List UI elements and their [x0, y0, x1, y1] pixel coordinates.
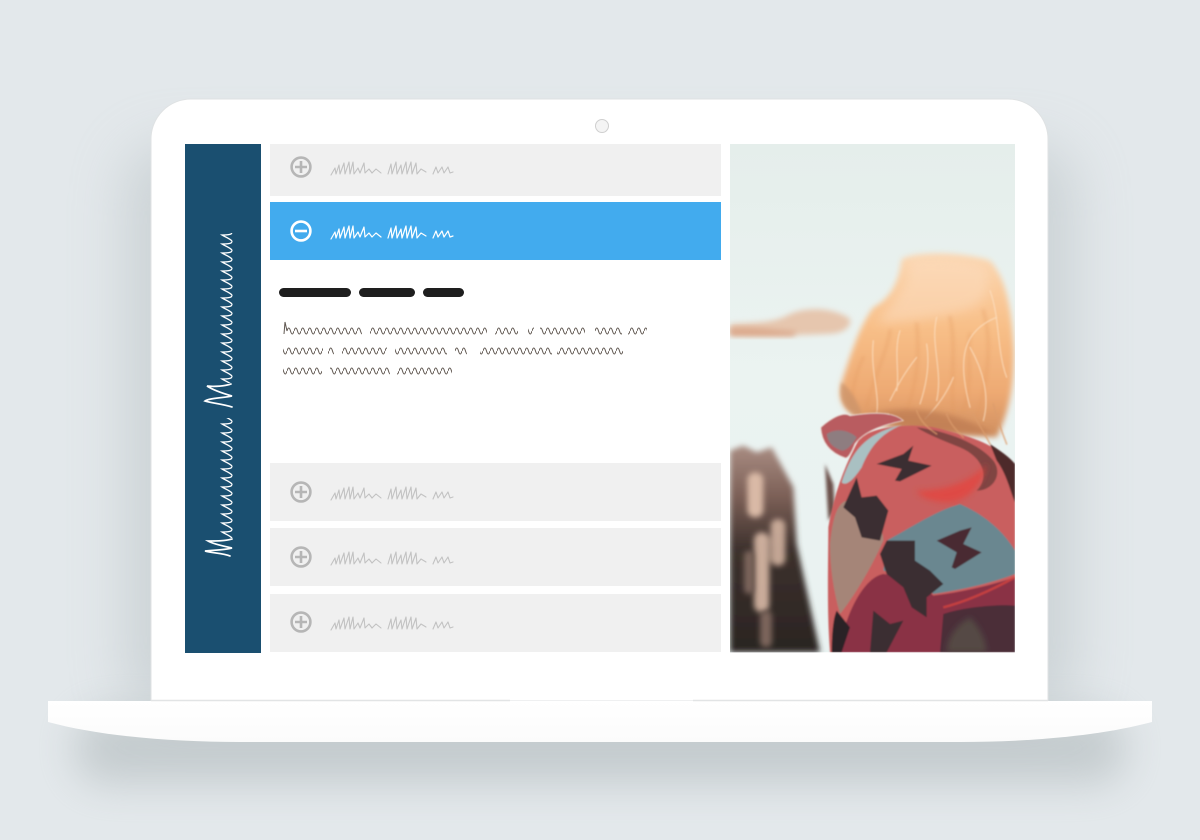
- red glare: [917, 464, 987, 502]
- hair: [840, 254, 1014, 437]
- icon: minus: [292, 222, 310, 240]
- photo: woman in patterned blanket: [730, 144, 1015, 652]
- accordion row 2 active: [270, 202, 721, 260]
- distant landmass: [730, 309, 850, 335]
- blurred post: [730, 446, 835, 652]
- laptop base: [48, 700, 1152, 742]
- base hinge line: [151, 700, 1048, 702]
- icon: plus: [292, 613, 310, 631]
- row label: [331, 617, 453, 630]
- accordion row 5: [270, 594, 721, 652]
- icon: plus: [292, 483, 310, 501]
- sidebar panel: [185, 144, 261, 653]
- paragraph line 1: [284, 322, 647, 335]
- row label: [331, 226, 453, 239]
- content heading bars: [279, 288, 464, 297]
- row label: [331, 552, 453, 565]
- icon: plus: [292, 548, 310, 566]
- row label: [331, 487, 453, 500]
- paragraph line 3: [283, 365, 452, 375]
- icon: plus: [292, 158, 310, 176]
- laptop lid: [151, 99, 1048, 701]
- beige side panel: [830, 500, 883, 614]
- paragraph line 2: [283, 345, 623, 355]
- dark zigzag motifs: [843, 446, 982, 652]
- webcam: [596, 120, 608, 132]
- accordion row 4: [270, 528, 721, 586]
- accordion row 1: [270, 144, 721, 196]
- lower red panel: [840, 574, 1015, 652]
- patterned blanket: [821, 413, 1015, 652]
- row label: [331, 162, 453, 175]
- blanket collar: [821, 413, 903, 458]
- accordion content: [279, 288, 647, 375]
- laptop shadow: [75, 145, 1125, 784]
- hair wisps over blanket: [916, 412, 1008, 446]
- sidebar handwritten title: [205, 233, 233, 556]
- accordion row 3: [270, 463, 721, 521]
- blue panel: [883, 504, 1015, 594]
